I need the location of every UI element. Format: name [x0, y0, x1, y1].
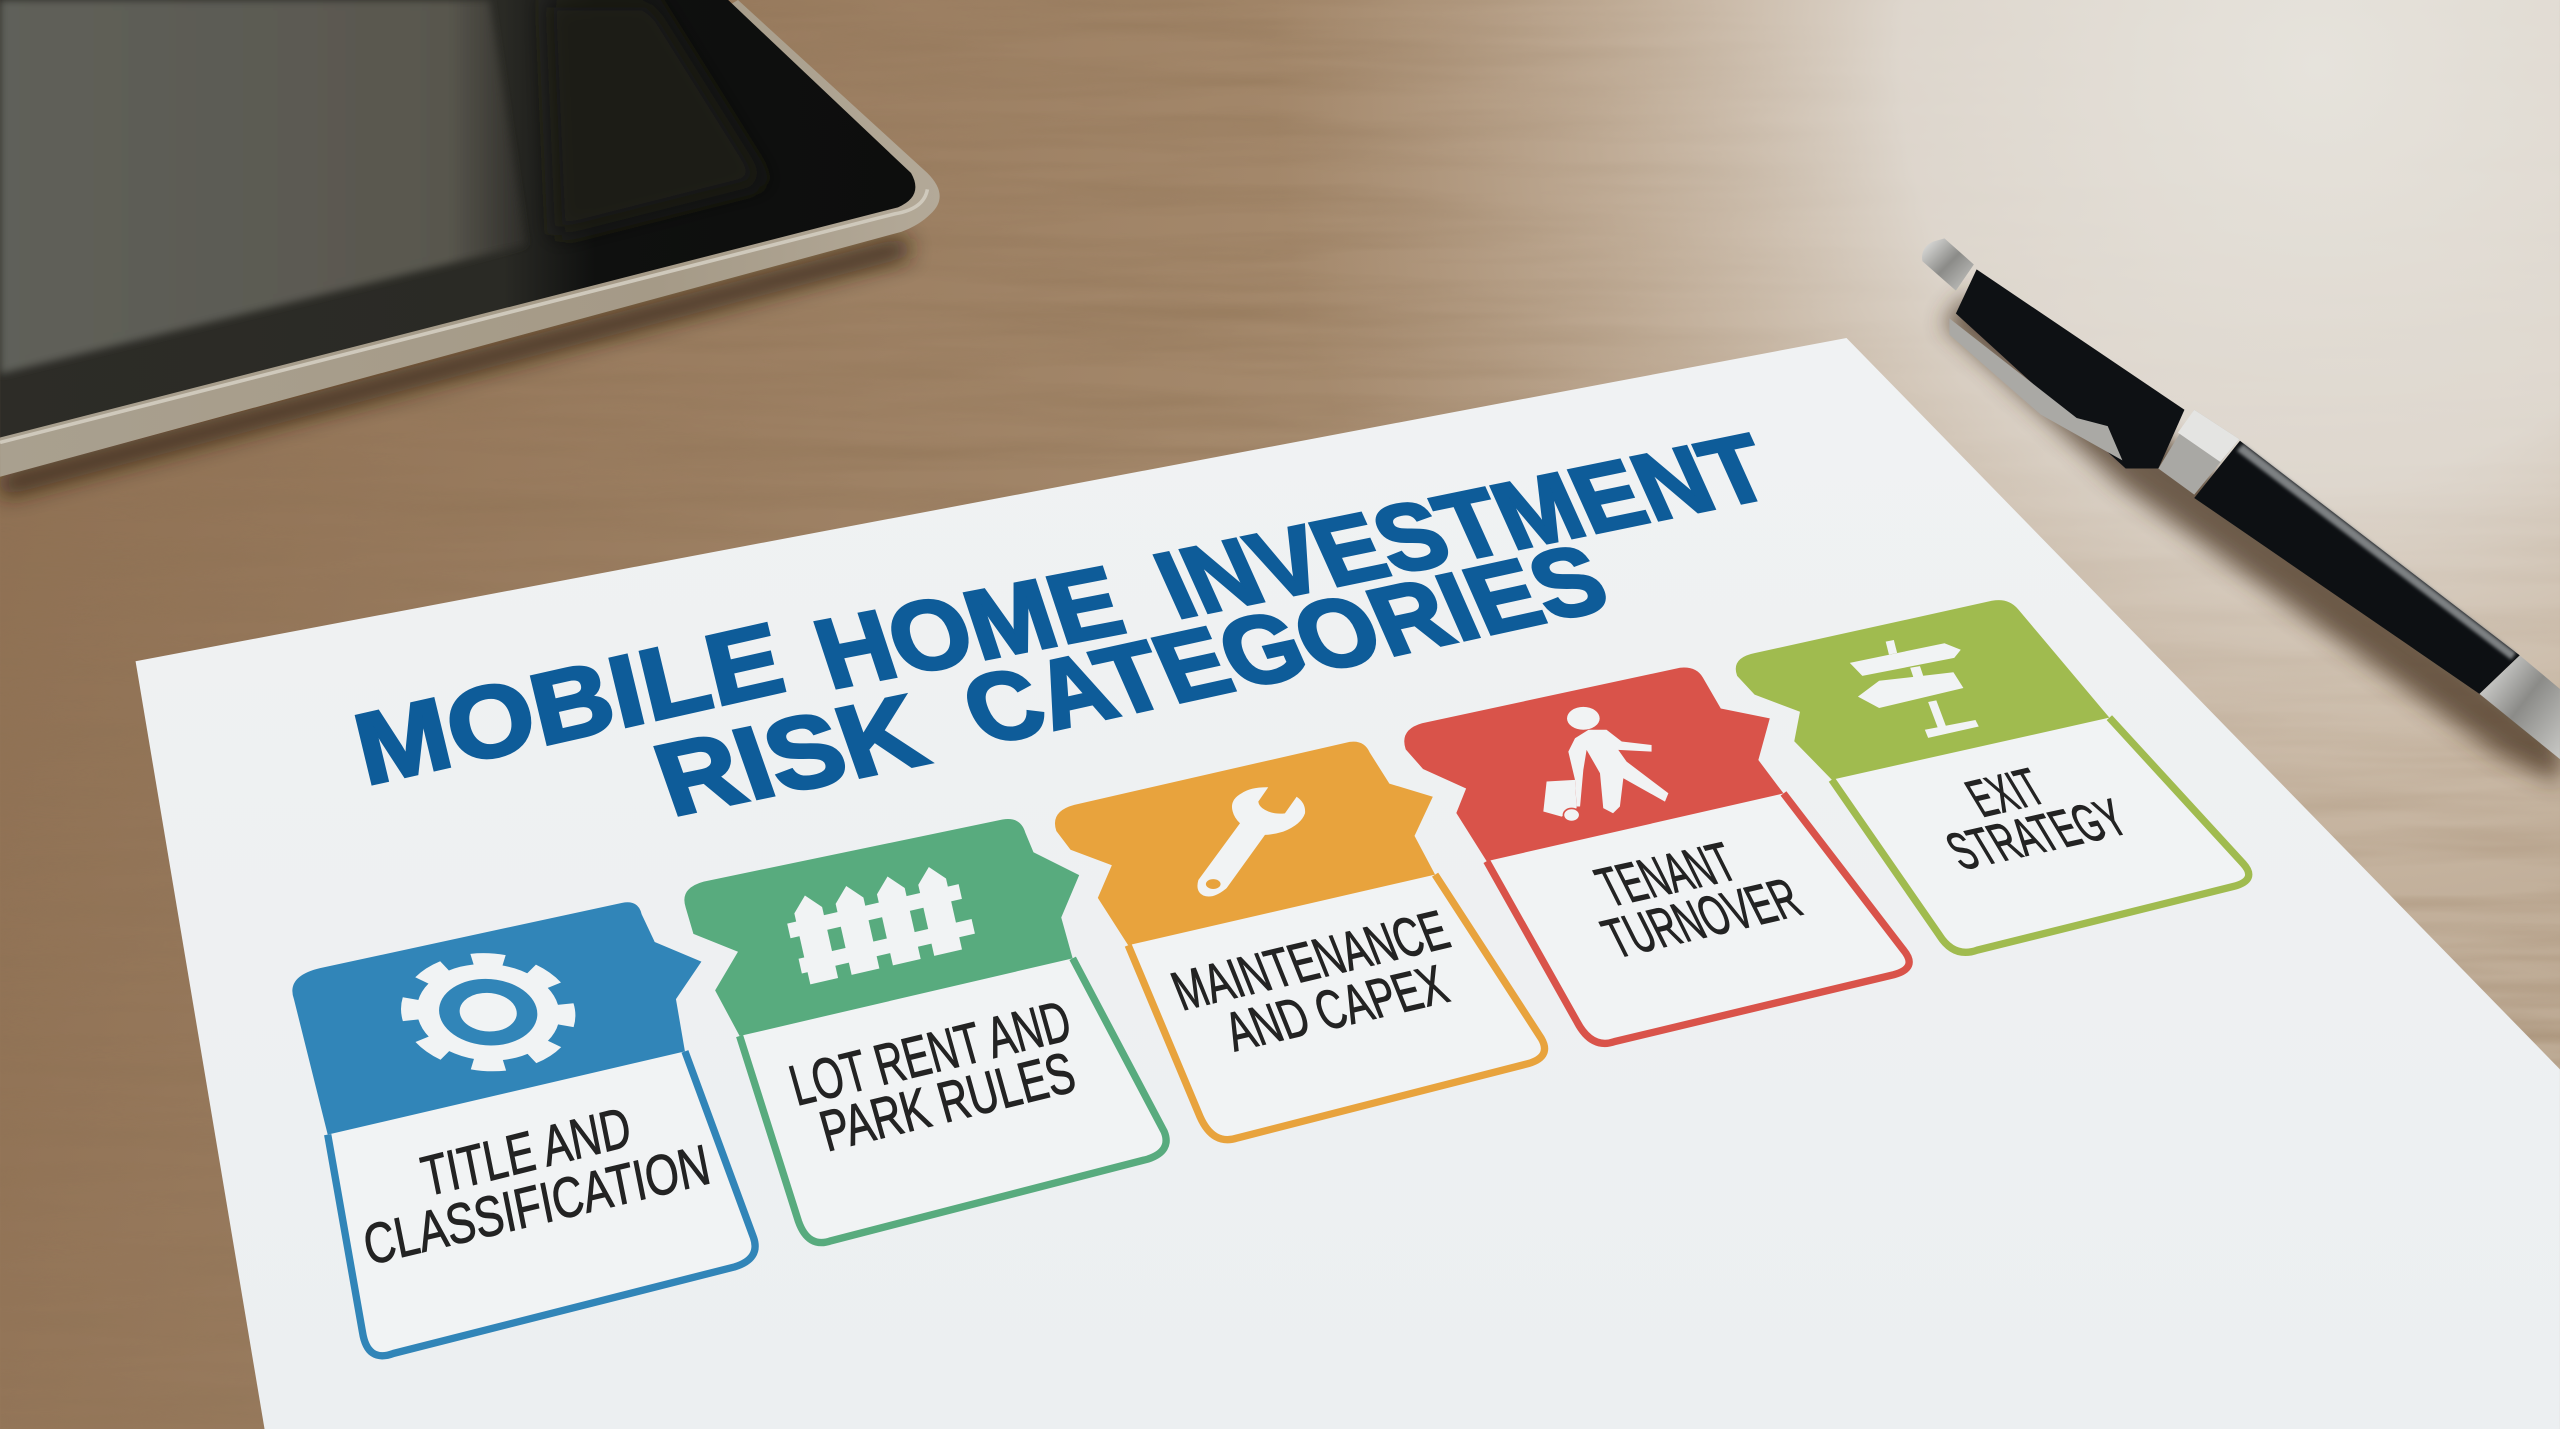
- icon: signpost: [1850, 640, 1979, 738]
- label: [1163, 899, 1458, 1063]
- pen: [1922, 238, 2560, 784]
- label: [1936, 758, 2138, 881]
- title: RISK: [641, 674, 939, 837]
- card: maintenance and capex: [1055, 742, 1545, 1140]
- label: LOT RENT AND: [783, 989, 1078, 1118]
- title: INVESTMENT: [1140, 415, 1786, 639]
- card: title and classification: [292, 902, 755, 1356]
- icon: wrench: [1197, 787, 1305, 897]
- label: TURNOVER: [1592, 866, 1811, 970]
- tablet device: [0, 0, 940, 487]
- label: EXIT: [1956, 758, 2055, 828]
- label: TITLE AND: [416, 1095, 636, 1209]
- paper sheet: [136, 338, 2560, 1429]
- card: lot rent and park rules: [684, 819, 1166, 1243]
- card: exit strategy: [1736, 600, 2249, 952]
- label: MAINTENANCE: [1163, 899, 1458, 1022]
- icon: gear: [396, 952, 580, 1072]
- label: PARK RULES: [813, 1041, 1082, 1164]
- icon: person with suitcase: [1543, 707, 1668, 822]
- label: CLASSIFICATION: [358, 1134, 715, 1278]
- label: [783, 989, 1082, 1164]
- title: HOME: [802, 545, 1136, 709]
- label: TENANT: [1586, 831, 1746, 918]
- title: CATEGORIES: [946, 524, 1623, 765]
- card: tenant turnover: [1404, 668, 1909, 1043]
- icon: fence: [782, 860, 978, 986]
- title: [345, 415, 1786, 837]
- label: AND CAPEX: [1216, 953, 1456, 1063]
- title: MOBILE: [345, 602, 794, 807]
- label: STRATEGY: [1936, 789, 2138, 881]
- label: [1586, 831, 1811, 970]
